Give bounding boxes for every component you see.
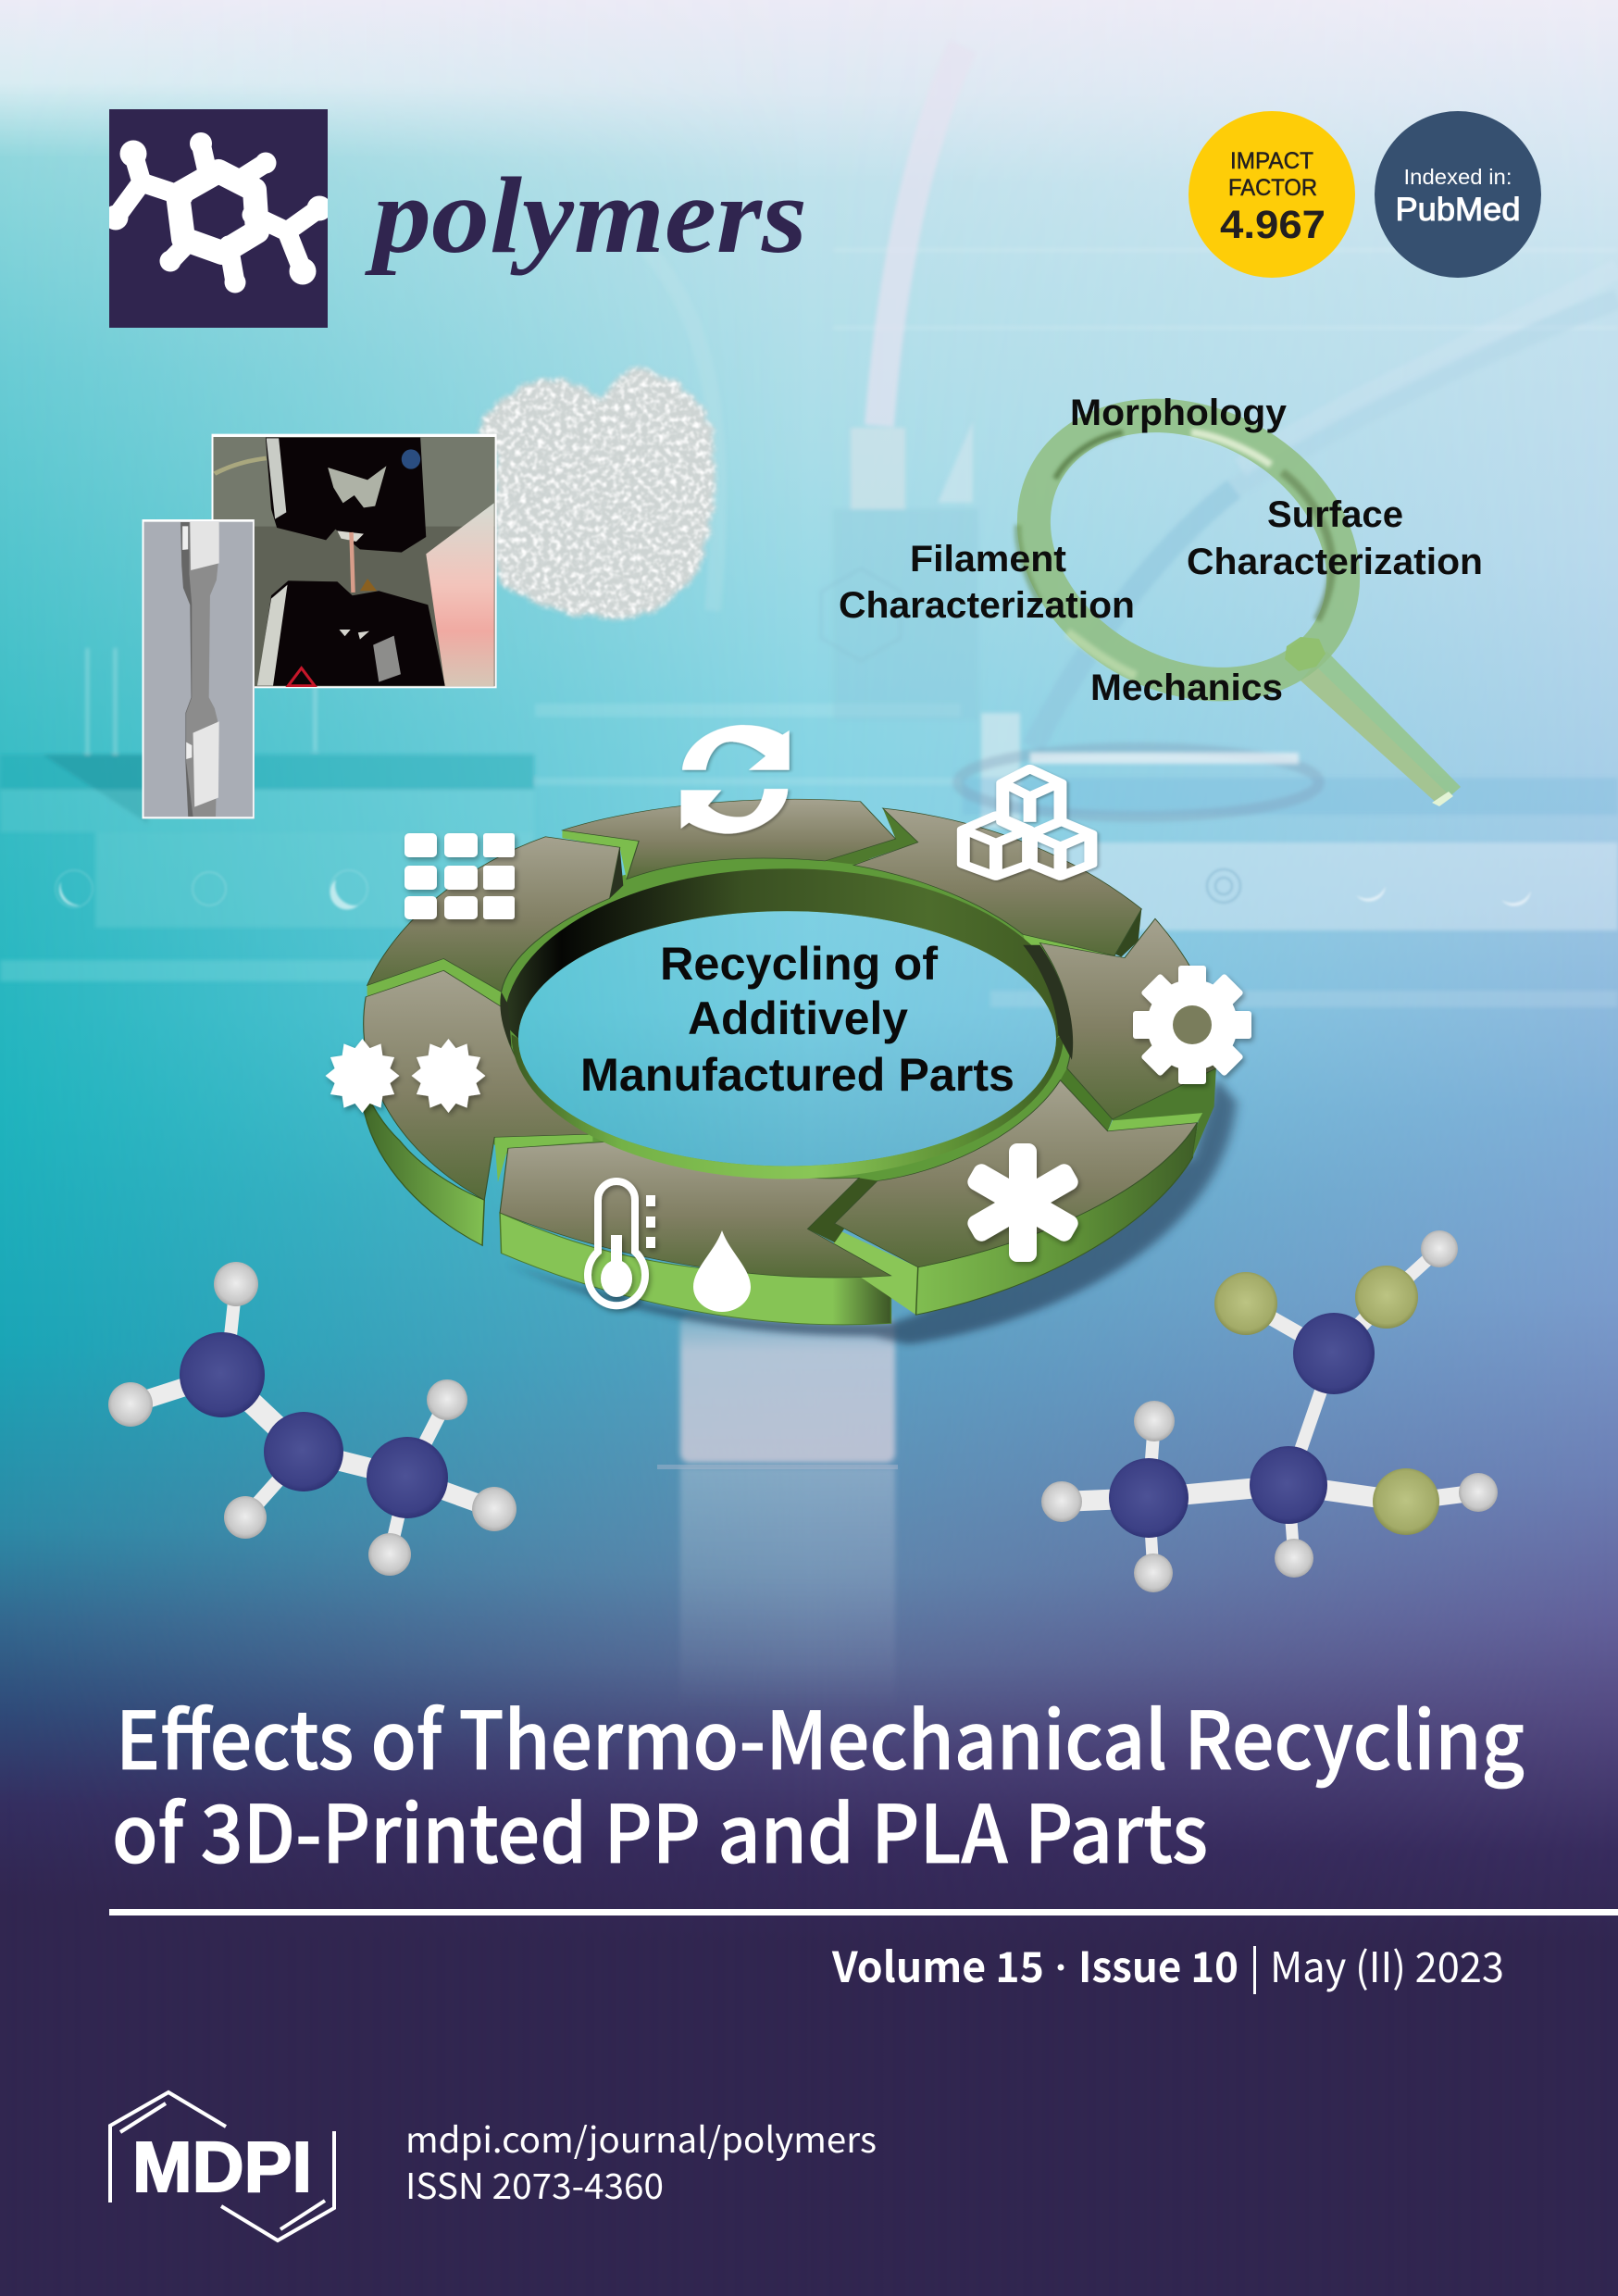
issue line: May (II) 2023 bbox=[1270, 1934, 1504, 1994]
magnifier labels: Characterization bbox=[1187, 542, 1483, 582]
connector bbox=[1285, 637, 1326, 671]
ring bbox=[964, 340, 1413, 760]
icon: water drop bbox=[693, 1230, 751, 1312]
icon: two stars bbox=[326, 1039, 485, 1113]
ring arrow segments bbox=[364, 799, 1217, 1278]
logo molecule bbox=[104, 132, 331, 293]
badge: indexed in PubMed: PubMed bbox=[1396, 192, 1520, 228]
journal logo bbox=[104, 109, 331, 328]
magnifying glass bbox=[964, 340, 1461, 806]
magnifier labels: Filament bbox=[910, 539, 1066, 580]
icon: grid bbox=[404, 833, 515, 919]
upper grip bbox=[215, 458, 267, 474]
segment: stars bbox=[364, 970, 592, 1200]
article title: of 3D-Printed PP and PLA Parts bbox=[112, 1770, 1208, 1886]
MDPI logo: MDPI bbox=[132, 2128, 312, 2207]
specimen strand bbox=[351, 532, 354, 593]
badge: impact factor: IMPACT bbox=[1230, 148, 1313, 174]
molecule left bbox=[108, 1262, 517, 1576]
background photo: blurred 3D printer bbox=[0, 46, 1618, 1007]
segment: thermometer and drop bbox=[500, 1142, 890, 1278]
handle bbox=[1301, 651, 1461, 805]
molecule right bbox=[1041, 1230, 1498, 1592]
pellets bbox=[477, 368, 715, 618]
badge: impact factor: 4.967 bbox=[1220, 203, 1326, 247]
ring centre label: Additively bbox=[688, 992, 908, 1044]
background: rail screws bbox=[56, 869, 1531, 909]
segment: grid bbox=[367, 837, 620, 992]
article title bbox=[112, 1677, 1525, 1886]
icon: thermometer bbox=[588, 1181, 655, 1305]
journal url and ISSN: mdpi.com/journal/polymers bbox=[405, 2112, 877, 2163]
magnifier labels: Characterization bbox=[839, 585, 1135, 626]
segment: gear bbox=[1040, 918, 1217, 1119]
green gaps between segments bbox=[825, 808, 918, 865]
lower grip bbox=[258, 580, 445, 686]
recycling ring bbox=[326, 725, 1251, 1344]
MDPI logo bbox=[110, 2092, 334, 2240]
issue line bbox=[831, 1934, 1504, 1994]
article title: Effects of Thermo-Mechanical Recycling bbox=[116, 1677, 1525, 1792]
magnifier labels: Mechanics bbox=[1090, 668, 1283, 708]
ring 3D body bbox=[359, 808, 1216, 1325]
ring centre label bbox=[580, 938, 1014, 1101]
white wall with red glow bbox=[426, 503, 494, 686]
ring centre label: Manufactured Parts bbox=[580, 1049, 1014, 1101]
magnifier labels bbox=[839, 393, 1483, 708]
journal url and ISSN: ISSN 2073-4360 bbox=[405, 2158, 664, 2209]
ring centre label: Recycling of bbox=[660, 938, 938, 990]
dark inner side shading bbox=[500, 847, 1073, 1060]
inner wall bbox=[504, 868, 1070, 1039]
journal url and ISSN bbox=[405, 2112, 877, 2209]
icon: recycle arrows bbox=[681, 725, 790, 834]
near rim of hole bbox=[512, 1034, 1064, 1179]
badge: impact factor: FACTOR bbox=[1228, 175, 1317, 201]
badge: indexed in PubMed bbox=[1375, 111, 1541, 278]
issue line: Volume 15 bbox=[831, 1934, 1044, 1994]
icon: gear bbox=[1133, 966, 1251, 1084]
tensile test photo bbox=[212, 434, 497, 688]
magnifier labels: Morphology bbox=[1070, 393, 1288, 433]
specimen drawing bbox=[142, 519, 255, 818]
background: nozzle column and reflection bbox=[657, 1315, 898, 1708]
journal name: polymers bbox=[364, 155, 807, 276]
segment: cubes bbox=[853, 808, 1141, 955]
segment: recycle bbox=[562, 799, 896, 880]
magnifier labels: Surface bbox=[1267, 494, 1403, 535]
icon: asterisk bbox=[965, 1143, 1081, 1262]
badge: indexed in PubMed: Indexed in: bbox=[1403, 165, 1512, 189]
title rule bbox=[109, 1909, 1618, 1915]
segment: asterisk bbox=[835, 1080, 1197, 1267]
ring drop shadow bbox=[508, 1077, 1237, 1344]
rim underlay bbox=[435, 854, 1139, 1228]
badge: impact factor bbox=[1189, 111, 1355, 278]
icon: cubes bbox=[964, 768, 1090, 876]
issue line: Issue 10 bbox=[1078, 1934, 1238, 1994]
